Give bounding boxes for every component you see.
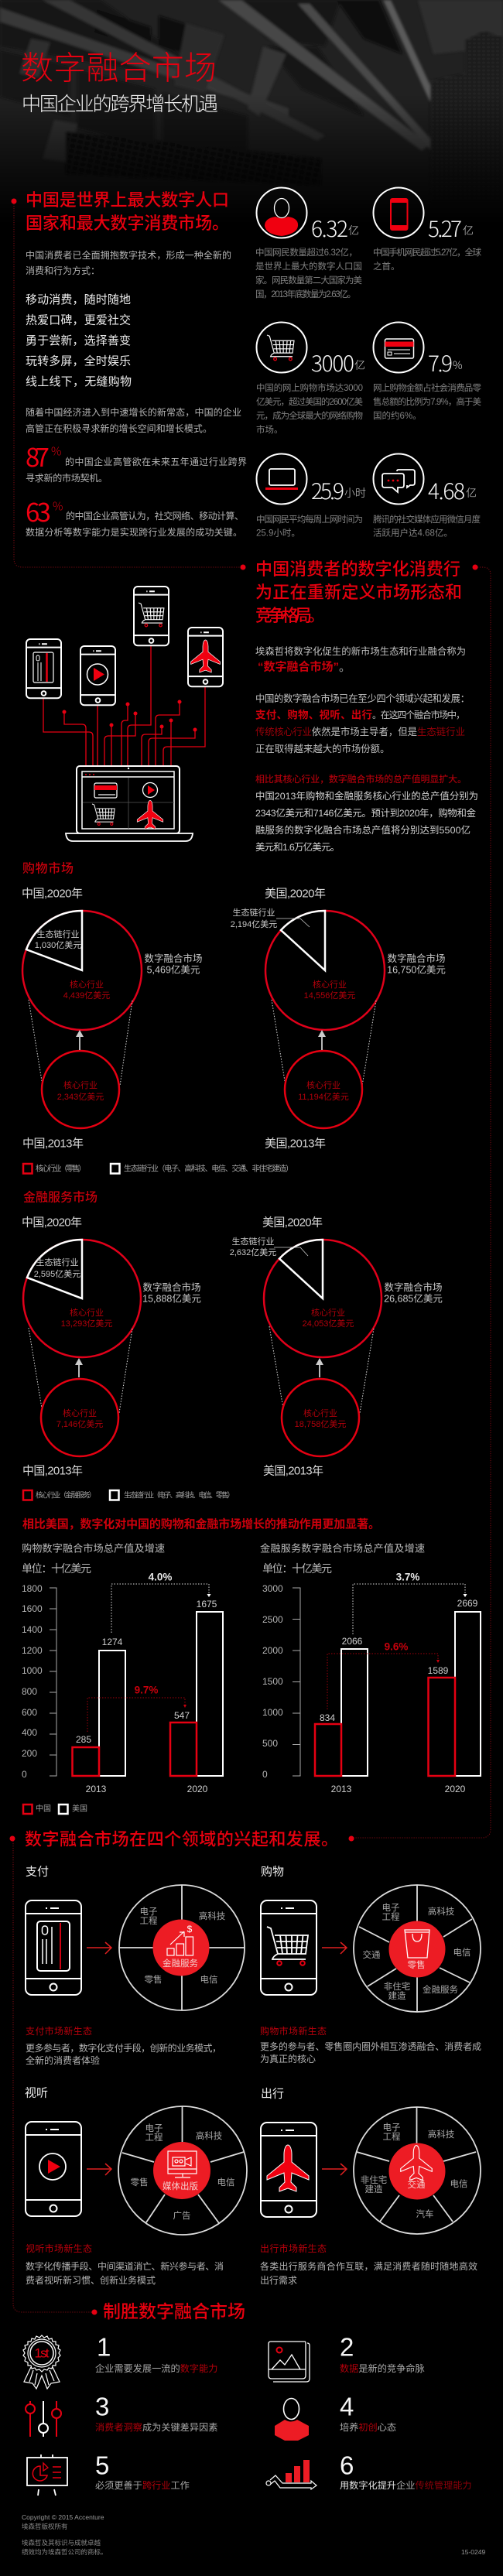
point 5: 必须更善于跨行业工作 <box>95 2479 190 2491</box>
panel: stat online shopping: 市场。 <box>256 424 283 435</box>
panel: audio-visual <box>25 2086 247 2286</box>
behaviour list: 热爱口碑，更爱社交 <box>26 313 131 327</box>
phone: payment <box>26 639 61 698</box>
label: US 2020: 美国,2020年 <box>262 1216 323 1229</box>
heading: 购物市场 <box>22 860 74 876</box>
wheel chart <box>354 2107 481 2234</box>
panel: stat share of retail: 国的约6%。 <box>373 410 422 421</box>
wheel chart: 工程 <box>382 1912 400 1922</box>
bar chart: shopping digital fusion market: 1200 <box>22 1645 43 1656</box>
panel: consumer behaviour redefining markets: 融服务的数字化融合市场总产值将分别达到5500亿 <box>255 824 470 836</box>
point 1: 企业需要发展一流的数字能力 <box>95 2362 217 2374</box>
panel: stat internet users: 是世界上最大的数字人口国 <box>255 261 362 272</box>
wheel chart: 非住宅 <box>384 1981 410 1992</box>
stat: 63%: % <box>53 498 63 514</box>
circle: China 2013 <box>29 1328 132 1456</box>
icon: credit card <box>373 322 424 373</box>
bar chart: financial services digital fusion market <box>260 1541 481 1794</box>
wheel chart <box>354 1885 481 2012</box>
bar chart: shopping digital fusion market: 1400 <box>22 1624 43 1635</box>
panel: consumer behaviour redefining markets: 传统核心行业依然是市场主导者，但是生态链行业 <box>255 726 465 737</box>
illustration: devices connected to laptop <box>26 587 223 841</box>
circle: US 2013 <box>269 1326 374 1456</box>
point 1 <box>23 2332 217 2389</box>
heading: 为正在重新定义市场形态和 <box>255 582 462 602</box>
legend: China and US: 美国 <box>72 1803 87 1814</box>
heading: 国家和最大数字消费市场。 <box>26 214 229 232</box>
icon: phone with play button <box>26 2122 81 2216</box>
label: 出行 <box>261 2088 284 2100</box>
definition text: 埃森哲将数字化促生的新市场生态和行业融合称为 <box>255 645 466 657</box>
panel: shopping: 更多的参与者、零售圈内圈外相互渗透融合、消费者成 <box>260 2041 481 2052</box>
background photo: city buildings <box>0 0 503 187</box>
panel: stat WeChat users <box>373 453 481 539</box>
bar chart: shopping digital fusion market: 1600 <box>22 1603 43 1614</box>
wheel chart: 电信 <box>217 2177 235 2188</box>
panel: consumer behaviour redefining markets: 支付、购物、视听、出行 <box>255 709 372 721</box>
label: China 2020: 中国,2020年 <box>22 1216 82 1229</box>
point 5 <box>27 2451 190 2496</box>
icon: mobile phone <box>373 187 424 238</box>
wheel chart: 电子 <box>382 1903 399 1913</box>
bar chart: shopping digital fusion market: 2020 <box>187 1784 208 1794</box>
pie: US 2020: 2,194亿美元 <box>231 919 277 929</box>
stat: 63%: 的中国企业高管认为，社交网络、移动计算、 <box>66 510 244 522</box>
point 1: 1 <box>97 2332 111 2362</box>
wheel chart: 建造 <box>365 2184 383 2195</box>
caption: 出行市场新生态 <box>260 2242 327 2254</box>
panel: stat internet users <box>255 187 362 299</box>
phone: shopping <box>134 587 169 645</box>
heading: 竞争格局。 <box>255 605 325 625</box>
footer: copyright: 15-0249 <box>461 2548 485 2556</box>
panel: stat internet users: 亿 <box>348 223 359 238</box>
panel: audio-visual: 费者视听新习惯、创新业务模式 <box>26 2274 156 2286</box>
icon: finance growth <box>167 1924 193 1955</box>
point 3: 消费者洞察成为关键差异因素 <box>95 2422 217 2433</box>
panel: China largest digital population <box>26 190 247 538</box>
pie: China 2020: 生态链行业 <box>36 1257 79 1267</box>
bar chart: shopping digital fusion market: 1274 <box>102 1637 123 1647</box>
legend: 核心行业（零售） <box>36 1164 86 1173</box>
panel: stat online shopping: 中国的网上购物市场达3000 <box>256 382 363 393</box>
bar chart: financial services digital fusion market: 3.7% <box>396 1571 419 1583</box>
circle: US 2013: 11,194亿美元 <box>298 1092 349 1102</box>
stat: 87%: 寻求新的市场契机。 <box>26 472 108 484</box>
point 6: 6 <box>340 2451 354 2479</box>
panel: consumer behaviour redefining markets: “数字融合市场”。 <box>258 659 351 673</box>
label: US digital fusion market: 26,685亿美元 <box>384 1292 443 1305</box>
panel: stat mobile users: 中国手机网民超过5.27亿，全球 <box>373 247 481 258</box>
label: 视听 <box>25 2086 48 2100</box>
label: China digital fusion market: 数字融合市场 <box>144 953 203 964</box>
bar chart: shopping digital fusion market: 9.7% <box>135 1684 158 1696</box>
four domains text: 中国的数字融合市场已在至少四个领域兴起和发展： <box>255 693 470 704</box>
panel: stat internet users: 国，2013年底数量为2.63亿。 <box>255 289 356 299</box>
bar chart: shopping digital fusion market: 单位：十亿美元 <box>22 1562 91 1575</box>
label: US 2013: 美国,2013年 <box>263 1464 323 1478</box>
pie: US 2020: 14,556亿美元 <box>304 990 355 1001</box>
point 3: 3 <box>95 2393 109 2420</box>
section connector lines <box>9 198 491 2315</box>
panel: stat weekly online hours: 25.9 <box>311 475 344 506</box>
arrow <box>87 1942 111 1954</box>
footer: copyright: 绩效均为埃森哲公司的商标。 <box>22 2548 108 2556</box>
point 6 <box>266 2451 472 2491</box>
label: China digital fusion market: 数字融合市场 <box>142 1281 201 1293</box>
panel: stat online shopping: 3000 <box>311 347 354 378</box>
panel: stat WeChat users: 亿 <box>466 485 477 501</box>
pie: China 2020: 13,293亿美元 <box>61 1319 112 1329</box>
point 4: 4 <box>340 2393 354 2420</box>
panel: stat share of retail: 7.9 <box>428 347 453 378</box>
bar chart: shopping digital fusion market: 800 <box>22 1686 37 1697</box>
pie: China 2020 <box>22 911 142 1030</box>
intro text: 消费和行为方式： <box>26 265 100 276</box>
stat: 63% <box>26 492 244 538</box>
heading: four domains: 数字融合市场在四个领域的兴起和发展。 <box>25 1829 338 1849</box>
bar chart: shopping digital fusion market: 285 <box>76 1734 91 1745</box>
panel: travel <box>260 2088 481 2286</box>
panel: stat online shopping <box>256 322 365 435</box>
behaviour list: 移动消费，随时随地 <box>26 292 131 306</box>
bar chart: shopping digital fusion market: 600 <box>22 1707 37 1718</box>
point 2 <box>269 2332 425 2382</box>
wheel chart: 电子 <box>382 2123 401 2133</box>
wheel chart: 金融服务 <box>423 1984 458 1995</box>
wheel chart: 高科技 <box>428 1906 455 1917</box>
title block <box>21 42 218 117</box>
icon: chat bubbles <box>373 453 424 505</box>
wheel chart: 电信 <box>200 1975 218 1985</box>
panel: stat weekly online hours: 25.9小时。 <box>256 528 300 539</box>
caption: 支付市场新生态 <box>26 2025 92 2037</box>
panel: stat WeChat users: 活跃用户达4.68亿。 <box>373 528 453 539</box>
bar chart: financial services digital fusion market: 834 <box>320 1712 335 1723</box>
panel: stat weekly online hours <box>256 453 366 539</box>
heading: 金融服务市场 <box>23 1190 98 1204</box>
point 4: 培养初创心态 <box>340 2421 396 2433</box>
stat: 63%: 数据分析等数字能力是实现跨行业发展的成功关键。 <box>26 526 242 538</box>
icon: growth bars and arrow <box>266 2460 317 2489</box>
panel: audio-visual: 数字化传播手段、中间渠道消亡、新兴参与者、消 <box>26 2260 224 2272</box>
pie: China 2020: 核心行业 <box>70 979 104 990</box>
pie: China 2020: 4,439亿美元 <box>63 990 110 1001</box>
bar chart: financial services digital fusion market: 2020 <box>445 1784 466 1794</box>
heading: 中国是世界上最大数字人口 <box>26 190 229 209</box>
label: US digital fusion market: 数字融合市场 <box>384 1281 443 1293</box>
wheel chart: 高科技 <box>428 2129 455 2140</box>
wheel chart: 高科技 <box>196 2130 223 2141</box>
wheel chart: 电信 <box>450 2179 467 2189</box>
panel: shopping: 为真正的核心 <box>260 2053 316 2065</box>
icon: media monitor <box>168 2151 197 2177</box>
bar chart: shopping digital fusion market: 400 <box>22 1727 37 1738</box>
panel: shopping market <box>22 860 446 1173</box>
wheel chart: 工程 <box>382 2132 401 2142</box>
pie: US 2020: 24,053亿美元 <box>303 1319 354 1329</box>
wheel chart: 电子 <box>139 1907 158 1917</box>
bar chart: financial services digital fusion market: 2013 <box>331 1784 352 1794</box>
pie: US 2020: 生态链行业 <box>232 1236 274 1247</box>
circle: China 2013: 核心行业 <box>63 1079 98 1090</box>
bar chart: financial services digital fusion market: 500 <box>262 1738 278 1749</box>
pie: US 2020: 生态链行业 <box>232 907 275 918</box>
circle: China 2013 <box>29 1000 132 1128</box>
pie: US 2020: 核心行业 <box>313 979 347 990</box>
panel: stat online shopping: 亿美元，超过美国的2600亿美 <box>256 396 364 407</box>
bar chart: shopping digital fusion market: 1800 <box>22 1583 43 1594</box>
label: China 2013: 中国,2013年 <box>22 1137 84 1150</box>
legend: 核心行业（金融服务） <box>36 1490 96 1500</box>
pie: China 2020: 2,595亿美元 <box>34 1269 80 1279</box>
bar chart: shopping digital fusion market: 547 <box>174 1710 190 1721</box>
icon: phone with card <box>26 1900 81 1995</box>
point 5: 5 <box>95 2451 109 2479</box>
panel: stat internet users: 6.32 <box>311 213 348 244</box>
wheel chart: 建造 <box>388 1990 406 2001</box>
point 3 <box>26 2393 217 2437</box>
panel: stat weekly online hours: 小时 <box>344 485 366 501</box>
bar chart: shopping digital fusion market: 购物数字融合市场总产值及增速 <box>22 1541 165 1554</box>
panel: travel: 出行需求 <box>260 2275 297 2286</box>
icon: finance growth: $ <box>187 1924 193 1935</box>
pie: US 2020 <box>230 1236 382 1357</box>
panel: shopping <box>260 1865 481 2065</box>
panel: consumer behaviour redefining markets: 。在这四个融合市场中， <box>372 709 465 720</box>
panel: stat online shopping: 元，成为全球最大的网络购物 <box>256 410 363 421</box>
circle: US 2013 <box>272 1000 376 1128</box>
bar chart: shopping digital fusion market: 2013 <box>86 1784 107 1794</box>
bar chart: financial services digital fusion market: 0 <box>262 1769 268 1780</box>
point 4 <box>275 2393 396 2441</box>
panel: stat share of retail: 售总额的比例为7.9%，高于美 <box>373 396 481 407</box>
bar chart: financial services digital fusion market: 1500 <box>262 1676 283 1687</box>
wheel chart: 交通 <box>362 1949 381 1960</box>
footer: copyright <box>22 2513 485 2556</box>
wheel chart <box>119 1885 245 2010</box>
panel: stat mobile users: 亿 <box>463 223 474 238</box>
circuit lines <box>43 646 205 766</box>
bar chart: financial services digital fusion market: 2500 <box>262 1614 283 1625</box>
panel: payments: 全新的消费者体验 <box>26 2054 100 2066</box>
panel: payments <box>26 1865 245 2066</box>
icon: award ribbon: 1st <box>34 2346 50 2360</box>
wheel chart: 电信 <box>453 1948 470 1958</box>
phone: video <box>80 646 115 705</box>
icon: plane <box>401 2145 432 2181</box>
laptop <box>66 766 193 841</box>
bar chart: financial services digital fusion market: 1000 <box>262 1707 283 1718</box>
label: China digital fusion market: 5,469亿美元 <box>147 964 200 975</box>
panel: financial services market <box>22 1190 443 1500</box>
label: 支付 <box>26 1865 49 1879</box>
wheel chart: 零售 <box>130 2177 149 2188</box>
behaviour list: 玩转多屏，全时娱乐 <box>26 354 131 368</box>
main title: 数字融合市场 <box>21 42 217 90</box>
bar chart: shopping digital fusion market: 200 <box>22 1748 37 1759</box>
point 6: 用数字化提升企业传统管理能力 <box>340 2479 472 2491</box>
panel: stat mobile users: 5.27 <box>428 213 462 244</box>
label: US 2013: 美国,2013年 <box>265 1137 326 1150</box>
legend: China and US: 中国 <box>36 1803 51 1814</box>
panel: consumer behaviour redefining markets <box>255 559 478 853</box>
label: 购物 <box>261 1865 284 1879</box>
point 2: 2 <box>340 2332 354 2362</box>
context text: 高管正在积极寻求新的增长空间和增长模式。 <box>26 422 212 434</box>
context text: 随着中国经济进入到中速增长的新常态，中国的企业 <box>26 406 241 418</box>
bar chart: financial services digital fusion market: 金融服务数字融合市场总产值及增速 <box>260 1541 425 1554</box>
footer: copyright: 埃森哲版权所有 <box>22 2523 68 2530</box>
circle: US 2013: 核心行业 <box>306 1079 340 1090</box>
arrow <box>322 1942 347 1954</box>
panel: stat WeChat users: 4.68 <box>428 475 465 506</box>
heading: digitisation impact China vs US: 相比美国，数字化对中国的购物和金融市场增长的推动作用更加显著。 <box>22 1517 380 1531</box>
circle: US 2013: 18,758亿美元 <box>295 1419 346 1429</box>
panel: stat share of retail: % <box>453 357 463 373</box>
wheel chart: 媒体出版 <box>163 2181 198 2191</box>
pie: US 2020 <box>231 907 385 1030</box>
arrow <box>322 2164 347 2175</box>
stat: 87% <box>26 437 247 484</box>
panel: payments: 更多参与者，数字化支付手段，创新的业务模式， <box>26 2042 221 2054</box>
panel: stat mobile users: 之首。 <box>373 261 399 272</box>
arrow <box>87 2164 111 2175</box>
wheel chart: 汽车 <box>416 2208 433 2219</box>
legend <box>23 1490 234 1500</box>
panel: winning points <box>23 2332 472 2496</box>
icon: sliders <box>26 2401 61 2437</box>
label: US 2020: 美国,2020年 <box>265 887 326 901</box>
wheel chart: 金融服务 <box>163 1958 198 1969</box>
label: China 2013: 中国,2013年 <box>22 1464 83 1478</box>
panel: consumer behaviour redefining markets: 美元和1.6万亿美元。 <box>255 841 340 853</box>
bar chart: shopping digital fusion market: 0 <box>22 1769 27 1780</box>
legend: China and US <box>23 1803 87 1814</box>
icon: cart <box>257 322 306 373</box>
bar chart: financial services digital fusion market: 2669 <box>457 1598 478 1609</box>
wheel chart: 工程 <box>145 2133 163 2143</box>
bar chart: financial services digital fusion market: 2066 <box>342 1636 363 1647</box>
circle: China 2013: 7,146亿美元 <box>56 1419 103 1429</box>
wheel chart: 零售 <box>144 1974 163 1985</box>
panel: consumer behaviour redefining markets: 2343亿美元和7146亿美元。预计到2020年，购物和金 <box>255 807 477 819</box>
bar chart: financial services digital fusion market: 3000 <box>262 1583 283 1594</box>
panel: stat weekly online hours: 中国网民平均每周上网时间为 <box>256 514 363 525</box>
behaviour list: 勇于尝新，选择善变 <box>26 334 131 347</box>
icon: phone with plane <box>261 2123 317 2217</box>
icon: presentation board <box>27 2455 67 2496</box>
icon: person <box>275 2399 309 2441</box>
heading: winning the market: 制胜数字融合市场 <box>103 2301 245 2321</box>
panel: stat internet users: 中国网民数量超过6.32亿， <box>255 247 358 258</box>
wheel chart: 非住宅 <box>361 2174 387 2185</box>
wheel chart: 工程 <box>139 1916 158 1926</box>
legend: 生态链行业（电子、高科技、电信、交通、非住宅建造） <box>124 1164 293 1173</box>
circle: China 2013: 核心行业 <box>63 1408 97 1418</box>
bar chart: shopping digital fusion market: 1000 <box>22 1665 43 1676</box>
panel: travel: 各类出行服务商合作互联，满足消费者随时随地高效 <box>260 2260 477 2272</box>
pie: US 2020: 2,632亿美元 <box>230 1247 276 1257</box>
panel: consumer behaviour redefining markets: 中国2013年购物和金融服务核心行业的总产值分别为 <box>255 790 478 802</box>
circle: China 2013: 2,343亿美元 <box>57 1092 104 1102</box>
panel: stat online shopping: 亿 <box>354 357 365 373</box>
label: US digital fusion market: 数字融合市场 <box>387 953 446 964</box>
intro text: 中国消费者已全面拥抱数字技术，形成一种全新的 <box>26 249 231 261</box>
heading: 中国消费者的数字化消费行 <box>255 559 460 579</box>
stat: 87%: 的中国企业高管欲在未来五年通过行业跨界 <box>65 456 247 467</box>
bar chart: shopping digital fusion market: 1675 <box>197 1599 217 1610</box>
panel: stat share of retail <box>373 322 481 421</box>
bar chart: financial services digital fusion market: 单位：十亿美元 <box>262 1562 332 1575</box>
legend <box>23 1164 293 1173</box>
icon: shopping bag <box>405 1930 429 1958</box>
icon: picture stack <box>269 2342 310 2382</box>
footer: copyright: 埃森哲及其标识与成就卓越 <box>22 2539 101 2547</box>
pie: China 2020 <box>23 1240 141 1357</box>
caption: 购物市场新生态 <box>260 2025 327 2037</box>
point 2: 数据是新的竞争命脉 <box>340 2362 425 2374</box>
subtitle: 中国企业的跨界增长机遇 <box>22 89 218 117</box>
market size text: 相比其核心行业，数字融合市场的总产值明显扩大。 <box>255 773 467 785</box>
phone: travel <box>188 628 223 686</box>
panel: stat internet users: 家。网民数量第二大国家为美 <box>255 275 362 286</box>
label: US digital fusion market: 16,750亿美元 <box>387 964 446 975</box>
bar chart: financial services digital fusion market: 9.6% <box>385 1640 408 1653</box>
wheel chart: 电子 <box>145 2123 163 2133</box>
bar chart: shopping digital fusion market: 4.0% <box>149 1571 172 1583</box>
pie: US 2020: 核心行业 <box>311 1307 345 1318</box>
stat: 63%: 63 <box>26 492 51 529</box>
wheel chart: 交通 <box>407 2179 426 2190</box>
stat: 87%: % <box>51 443 61 460</box>
icon: award ribbon <box>23 2335 60 2389</box>
panel: stat WeChat users: 腾讯的社交媒体应用微信月度 <box>373 514 481 525</box>
caption: 视听市场新生态 <box>26 2242 92 2254</box>
wheel chart <box>118 2106 247 2235</box>
panel: stat mobile users <box>373 187 481 272</box>
wheel chart: 广告 <box>173 2211 190 2221</box>
circle: US 2013: 核心行业 <box>303 1408 337 1418</box>
bar chart: financial services digital fusion market: 1589 <box>428 1665 449 1676</box>
stat: 87%: 87 <box>26 437 50 474</box>
wheel chart: 零售 <box>407 1959 426 1970</box>
icon: laptop <box>257 453 306 505</box>
wheel chart: 高科技 <box>199 1911 226 1921</box>
legend: 生态链行业（电子、高科技、电信、零售） <box>124 1490 234 1500</box>
footer: copyright: Copyright © 2015 Accenture <box>22 2513 104 2521</box>
behaviour list: 线上线下，无缝购物 <box>26 375 132 388</box>
bar chart: shopping digital fusion market <box>22 1541 223 1794</box>
pie: China 2020: 核心行业 <box>70 1307 104 1318</box>
panel: consumer behaviour redefining markets: 正在取得越来越大的市场份额。 <box>255 743 389 754</box>
icon: phone with cart <box>261 1900 317 1995</box>
pie: China 2020: 1,030亿美元 <box>35 940 81 950</box>
icon: person <box>257 187 306 238</box>
panel: stat share of retail: 网上购物金额占社会消费品零 <box>373 382 481 393</box>
label: China 2020: 中国,2020年 <box>22 887 83 901</box>
bar chart: financial services digital fusion market: 2000 <box>262 1645 283 1656</box>
label: China digital fusion market: 15,888亿美元 <box>142 1292 201 1305</box>
pie: China 2020: 生态链行业 <box>37 929 79 939</box>
